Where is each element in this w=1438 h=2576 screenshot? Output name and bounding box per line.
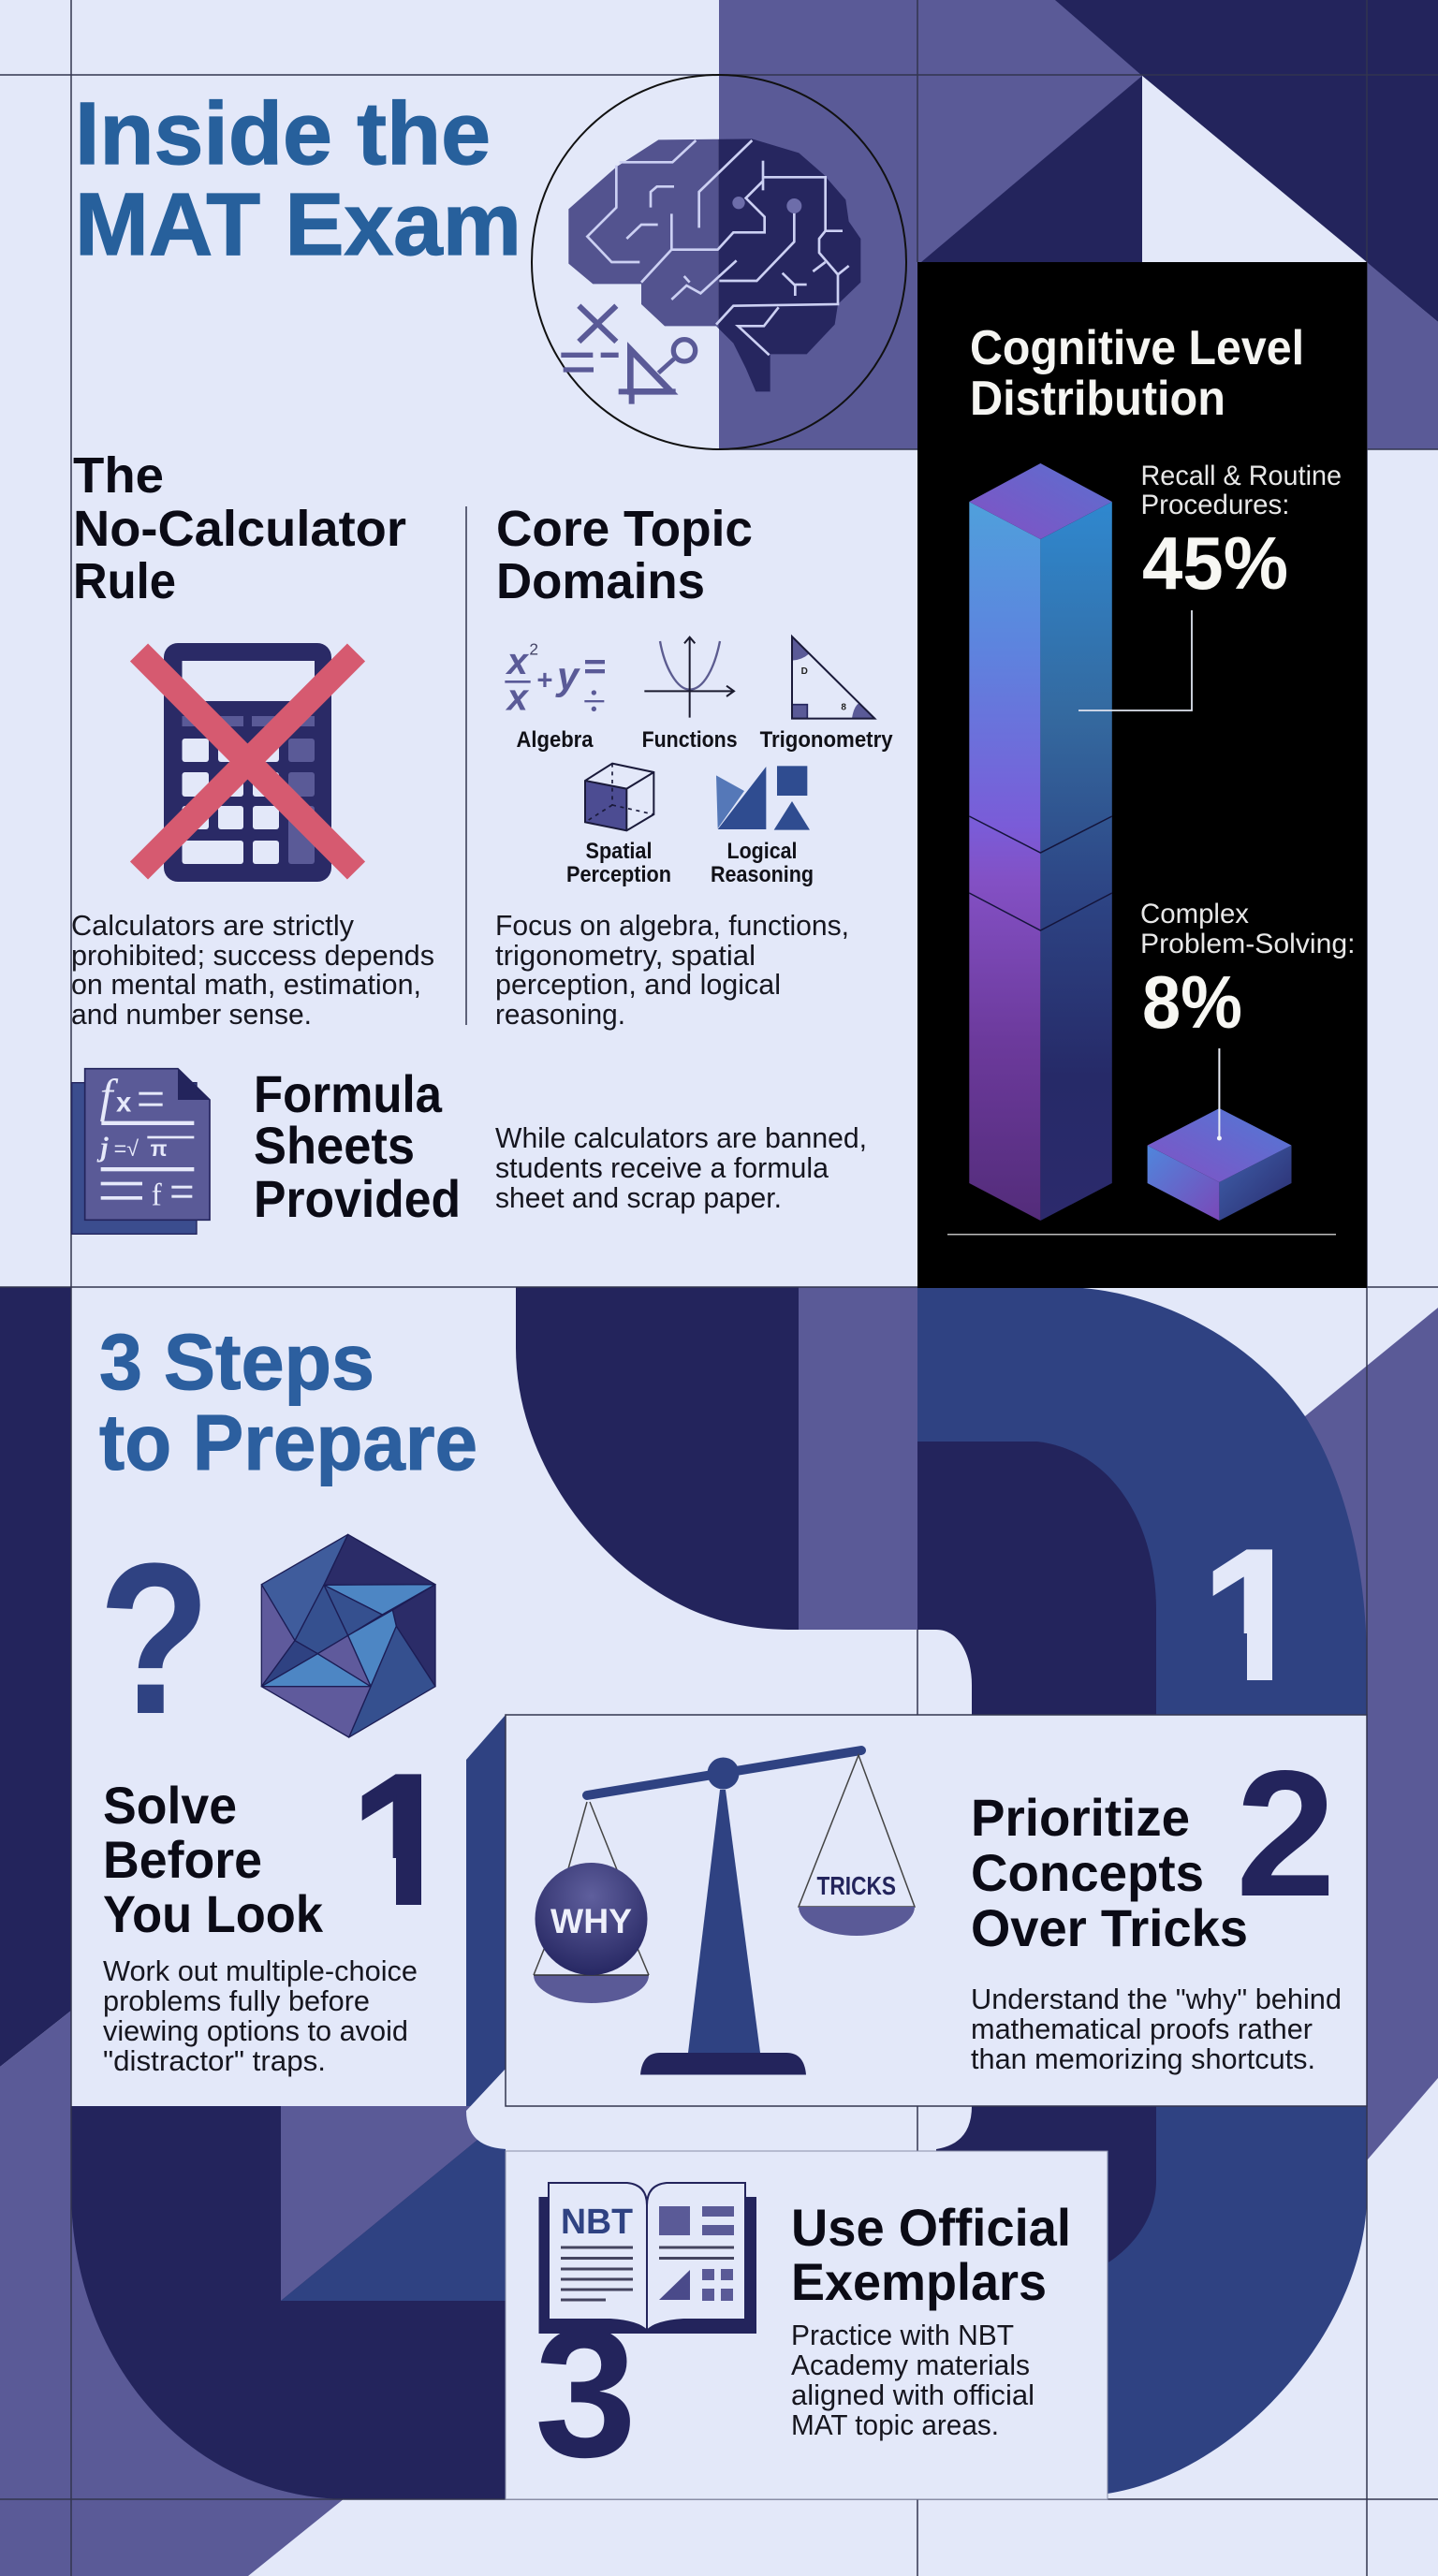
text: step 2 description: than memorizing shortcuts. [971, 2042, 1315, 2075]
topic domain labels [517, 727, 893, 887]
heading: 3 Steps to Prepare: to Prepare [99, 1398, 477, 1486]
topic domain labels: Reasoning [711, 862, 814, 887]
title: MAT Exam [75, 175, 521, 274]
card: step 3 [506, 2151, 1108, 2499]
topic domain labels: Logical [726, 839, 798, 864]
text: step 1 description [103, 1954, 418, 2077]
heading: Prioritize Concepts Over Tricks [971, 1788, 1248, 1957]
icon: formula sheet: x [116, 1087, 132, 1118]
label: complex problem solving: Complex [1140, 899, 1249, 929]
numeral: step 2: 2 [1236, 1733, 1336, 1934]
text: formula sheet description [495, 1121, 867, 1214]
heading: Solve Before You Look: Solve [103, 1776, 237, 1835]
icon: algebra: 2 [529, 639, 538, 658]
heading: Formula Sheets Provided: Formula [254, 1064, 443, 1123]
text: formula sheet description: students receive a formula [495, 1151, 829, 1184]
icon: algebra: + [536, 666, 552, 696]
text: core topic description: trigonometry, spatial [495, 939, 756, 972]
icon: algebra: x [506, 641, 530, 682]
heading: Solve Before You Look: Before [103, 1830, 262, 1889]
heading: 3 Steps to Prepare: 3 Steps [99, 1318, 374, 1406]
icon: algebra [505, 639, 605, 718]
heading: Prioritize Concepts Over Tricks: Concepts [971, 1843, 1204, 1902]
heading: Solve Before You Look [103, 1776, 324, 1943]
heading: Solve Before You Look: You Look [103, 1884, 324, 1943]
icon: formula sheet: f [100, 1069, 119, 1121]
text: core topic description [495, 909, 849, 1031]
heading: The No-Calculator Rule [73, 447, 406, 609]
icon: crossed-out calculator [139, 643, 356, 882]
icon: open book NBT [539, 2183, 756, 2334]
label: recall and routine: Procedures: [1140, 490, 1290, 520]
label: recall and routine [1140, 461, 1342, 605]
icon: trigonometry triangle [792, 637, 874, 719]
numeral: large light 1: 1 [1202, 1512, 1306, 1720]
text: formula sheet description: sheet and scrap paper. [495, 1181, 782, 1214]
icon: question mark: ? [98, 1518, 211, 1759]
heading: Use Official Exemplars: Use Official [791, 2198, 1071, 2257]
icon: brain in circle [532, 75, 906, 449]
heading: Formula Sheets Provided: Sheets [254, 1116, 415, 1175]
text: step 3 description: Academy materials [791, 2349, 1030, 2381]
icon: open book NBT: NBT [561, 2203, 633, 2242]
background shapes: lower section curves [0, 1287, 1438, 2576]
label: complex problem solving [1140, 899, 1356, 1044]
text: core topic description: Focus on algebra, functions, [495, 909, 849, 942]
topic domain labels: Perception [566, 862, 671, 887]
leader line: 8 percent [1217, 1048, 1222, 1140]
heading: The No-Calculator Rule: Rule [73, 553, 176, 609]
heading: The No-Calculator Rule: No-Calculator [73, 501, 406, 557]
heading: Core Topic Domains: Domains [496, 553, 705, 609]
heading: Core Topic Domains [496, 501, 753, 609]
label: complex problem solving: 8% [1142, 960, 1242, 1044]
text: formula sheet description: While calculators are banned, [495, 1121, 867, 1154]
text: step 1 description: "distractor" traps. [103, 2044, 326, 2077]
heading: Formula Sheets Provided: Provided [254, 1169, 461, 1228]
text: step 1 description: Work out multiple-choice [103, 1954, 418, 1987]
heading: Prioritize Concepts Over Tricks: Over Tricks [971, 1898, 1248, 1957]
chart: tall 3D bar [969, 463, 1112, 1221]
topic domain labels: Trigonometry [760, 727, 893, 753]
topic domain labels: Spatial [586, 839, 652, 864]
heading: Formula Sheets Provided [254, 1064, 461, 1228]
text: core topic description: reasoning. [495, 998, 625, 1031]
label: complex problem solving: Problem-Solving: [1140, 929, 1356, 959]
icon: formula sheet: =√ [114, 1136, 139, 1161]
card background: step 1 [71, 1287, 466, 2106]
icon: formula sheet: j [96, 1132, 109, 1163]
text: step 3 description [791, 2319, 1034, 2441]
icon: algebra: y [555, 654, 580, 698]
text: step 2 description: mathematical proofs rather [971, 2012, 1313, 2045]
heading: Use Official Exemplars [791, 2198, 1071, 2311]
icon: logical shapes [716, 766, 810, 830]
panel heading: Distribution [970, 372, 1225, 426]
panel: cognitive level distribution [917, 262, 1367, 1288]
text: step 2 description: Understand the "why" behind [971, 1983, 1342, 2015]
text: core topic description: perception, and logical [495, 968, 781, 1001]
leader line: 45 percent [1078, 610, 1192, 710]
text: calculator rule description: Calculators are strictly [71, 909, 354, 942]
text: step 2 description [971, 1983, 1342, 2075]
panel heading [970, 321, 1304, 426]
text: step 1 description: viewing options to avoid [103, 2014, 408, 2047]
numeral: step 1: 1 [351, 1736, 455, 1945]
icon: balance scale: TRICKS [816, 1871, 896, 1900]
text: step 3 description: aligned with official [791, 2378, 1034, 2411]
title [75, 84, 521, 274]
icon: trigonometry triangle: D [801, 666, 808, 677]
icon: formula sheet [72, 1069, 210, 1234]
text: calculator rule description [71, 909, 434, 1031]
text: calculator rule description: on mental math, estimation, [71, 968, 421, 1001]
icon: formula sheet: π [151, 1136, 168, 1161]
chart baseline [947, 1234, 1336, 1236]
icon: trigonometry triangle: 8 [841, 703, 846, 713]
chart: short 3D block [1148, 1108, 1292, 1221]
heading: Core Topic Domains: Core Topic [496, 501, 753, 557]
heading: The No-Calculator Rule: The [73, 447, 164, 504]
text: step 3 description: Practice with NBT [791, 2319, 1014, 2351]
topic domain labels: Functions [642, 727, 738, 753]
text: calculator rule description: and number sense. [71, 998, 312, 1031]
icon: formula sheet: f [152, 1178, 163, 1212]
background shapes: top geometric block [719, 0, 1438, 449]
icon: faceted polyhedron [261, 1534, 435, 1737]
icon: balance scale [534, 1750, 915, 2074]
icon: spatial cube [585, 764, 653, 830]
label: recall and routine: 45% [1142, 521, 1288, 605]
text: calculator rule description: prohibited; success depends [71, 939, 434, 972]
numeral: step 3: 3 [535, 2291, 637, 2496]
heading: 3 Steps to Prepare [99, 1318, 477, 1486]
icon: balance scale: WHY [550, 1902, 632, 1940]
heading: Use Official Exemplars: Exemplars [791, 2252, 1047, 2311]
label: recall and routine: Recall & Routine [1140, 461, 1342, 491]
title: Inside the [75, 84, 491, 183]
card: step 2 [506, 1715, 1367, 2106]
topic domain labels: Algebra [517, 727, 594, 753]
text: step 1 description: problems fully before [103, 1984, 370, 2017]
panel heading: Cognitive Level [970, 321, 1304, 375]
text: step 3 description: MAT topic areas. [791, 2408, 999, 2441]
heading: Prioritize Concepts Over Tricks: Prioritize [971, 1788, 1190, 1847]
icon: functions graph [644, 637, 734, 718]
icon: algebra: x [506, 677, 530, 718]
